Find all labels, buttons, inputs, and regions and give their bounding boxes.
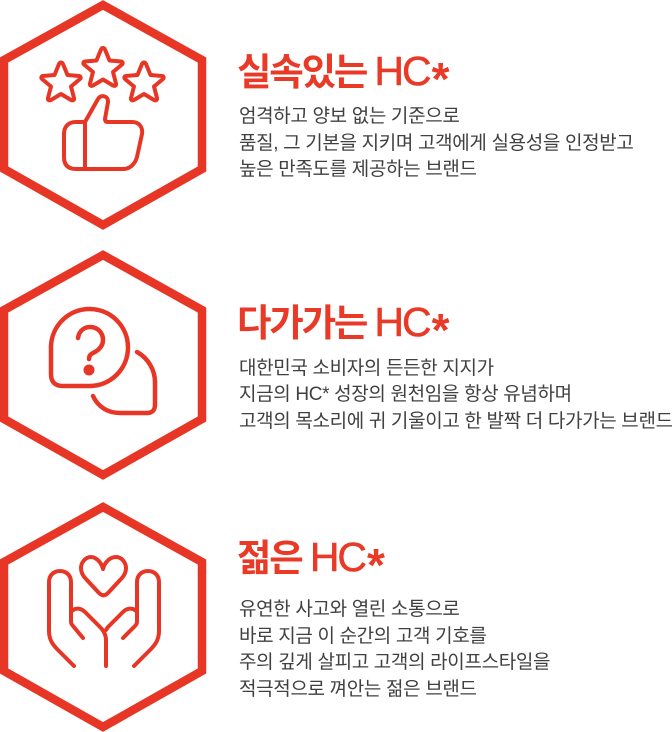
description: 높은 만족도를 제공하는 브랜드 xyxy=(239,159,477,180)
description: 고객의 목소리에 귀 기울이고 한 발짝 더 다가가는 브랜드 xyxy=(239,410,672,432)
section: 실속있는 HC xyxy=(0,0,634,230)
description: 대한민국 소비자의 든든한 지지가 xyxy=(239,358,494,378)
description: 주의 깊게 살피고 고객의 라이프스타일을 xyxy=(239,652,550,673)
description: 엄격하고 양보 없는 기준으로 xyxy=(239,106,460,127)
description xyxy=(239,358,672,432)
icon: hexagon with hands holding heart xyxy=(0,502,206,732)
description xyxy=(239,106,634,180)
icon: hexagon with speech bubbles xyxy=(0,250,206,480)
section: 다가가는 HC xyxy=(0,250,672,480)
description: 바로 지금 이 순간의 고객 기호를 xyxy=(239,626,487,646)
section: 젊은 HC xyxy=(0,502,550,732)
description: 지금의 HC* 성장의 원천임을 항상 유념하며 xyxy=(239,384,572,405)
description: 적극적으로 껴안는 젊은 브랜드 xyxy=(239,678,477,700)
title: 젊은 HC* xyxy=(237,534,385,591)
description: 유연한 사고와 열린 소통으로 xyxy=(239,599,460,620)
icon: hexagon with thumbs up and stars xyxy=(0,0,206,230)
title: 다가가는 HC* xyxy=(237,299,450,356)
description xyxy=(239,599,550,700)
title: 실속있는 HC* xyxy=(237,48,450,105)
description: 품질, 그 기본을 지키며 고객에게 실용성을 인정받고 xyxy=(239,132,634,154)
